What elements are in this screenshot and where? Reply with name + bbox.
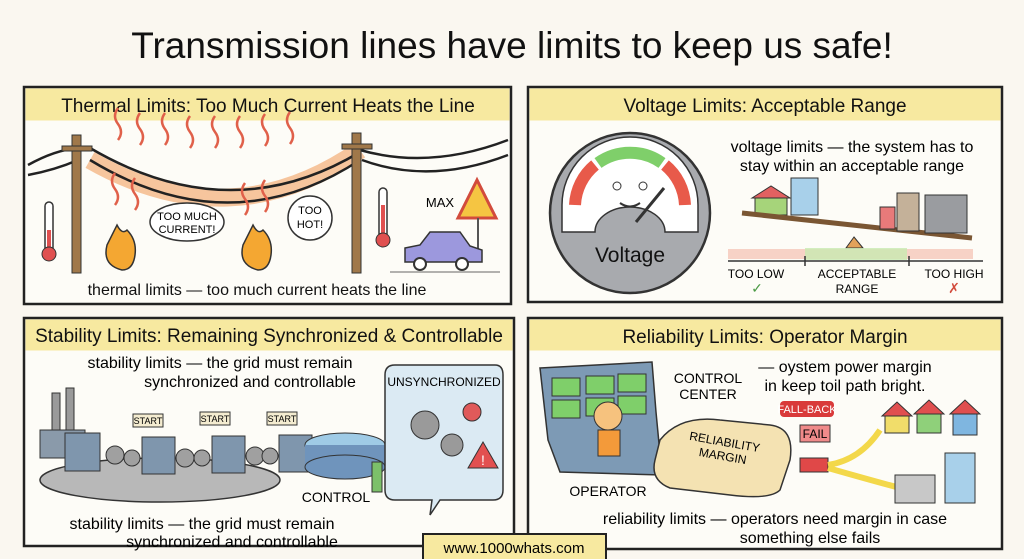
seesaw: buildings [742, 178, 972, 248]
illustration: control center and operator: OPERATOR [569, 483, 647, 499]
caption: reliability [603, 511, 947, 547]
illustration: generators on gear: START [201, 414, 230, 424]
icon: thermometer right [376, 188, 390, 247]
heading: voltage [530, 88, 1000, 120]
panel: reliability limits [528, 318, 1002, 549]
illustration: control center and operator: CONTROL [674, 370, 742, 386]
caption: stability: synchronized and controllable [126, 534, 338, 551]
illustration: reliability margin cushion [654, 419, 791, 497]
heading: stability [26, 320, 512, 350]
illustration: reliability margin cushion: MARGIN [698, 445, 748, 467]
heading: reliability: Reliability Limits: Operator Margin [622, 327, 908, 348]
callout: unsynchronized: ! [481, 452, 485, 468]
icon: thermometer left [42, 202, 56, 261]
footer: website [423, 534, 606, 559]
text: voltage description: voltage limits — the system has to [731, 139, 973, 156]
icon: MAX warning sign and car [390, 180, 500, 272]
illustration: power lines with heat [28, 108, 508, 273]
text: voltage description: stay within an acceptable range [740, 158, 964, 175]
callout: unsynchronized: UNSYNCHRONIZED [387, 375, 501, 389]
character: flame 1 with bubble [106, 203, 224, 270]
gauge: voltage meter: Voltage [595, 244, 665, 267]
character: flame 2 with bubble [242, 196, 332, 270]
text: stability top: synchronized and controllable [144, 374, 356, 391]
text: margin note: in keep toil path bright. [764, 378, 926, 395]
range scale: ✗ [948, 280, 960, 296]
illustration: generators on gear: CONTROL [302, 489, 370, 505]
character: flame 1 with bubble: CURRENT! [159, 224, 215, 236]
caption: stability [70, 516, 338, 551]
illustration: generators on gear: START [134, 416, 163, 426]
range scale: TOO LOW [728, 267, 785, 281]
panel: stability limits [24, 318, 514, 551]
icon: MAX warning sign and car: MAX [426, 195, 454, 210]
text: voltage description [731, 139, 973, 175]
heading: stability: Stability Limits: Remaining Synchronized & Controllable [35, 326, 503, 347]
illustration: generators on gear: START [268, 414, 297, 424]
illustration: reliability margin cushion: RELIABILITY [688, 429, 761, 455]
range scale: ACCEPTABLE [818, 267, 896, 281]
heading: reliability [530, 320, 1000, 350]
caption: thermal: thermal limits — too much current heats the line [88, 282, 426, 299]
panel: voltage limits [528, 87, 1002, 302]
text: stability top [88, 355, 356, 391]
illustration: generators on gear [40, 388, 414, 505]
character: flame 2 with bubble: TOO [298, 205, 322, 217]
caption: reliability: something else fails [740, 530, 880, 547]
text: margin note [758, 359, 932, 395]
panel: thermal limits [24, 87, 511, 304]
heading: voltage: Voltage Limits: Acceptable Range [623, 96, 907, 117]
label: fall-back / fail: FALL-BACK [777, 404, 837, 416]
title: Transmission lines have limits to keep us safe! [131, 25, 893, 66]
heading: thermal [26, 88, 510, 120]
range scale [728, 248, 984, 296]
text: stability top: stability limits — the grid must remain [88, 355, 352, 372]
heading: thermal: Thermal Limits: Too Much Current Heats the Line [61, 96, 475, 117]
label: fall-back / fail: FAIL [803, 427, 828, 441]
gauge: voltage meter [550, 133, 710, 293]
label: fall-back / fail [777, 401, 837, 472]
character: flame 2 with bubble: HOT! [297, 219, 323, 231]
range scale: TOO HIGH [924, 267, 984, 281]
illustration: control center and operator: CENTER [679, 386, 737, 402]
illustration: houses and buildings [828, 400, 980, 503]
footer: website: www.1000whats.com [443, 540, 584, 557]
illustration: control center and operator [540, 362, 742, 499]
range scale: RANGE [836, 282, 878, 296]
callout: unsynchronized [385, 365, 503, 515]
range scale: ✓ [751, 280, 763, 296]
caption: stability: stability limits — the grid must remain [70, 516, 334, 533]
caption: reliability: reliability limits — operators need margin in case [603, 511, 947, 528]
character: flame 1 with bubble: TOO MUCH [157, 211, 217, 223]
text: margin note: — oystem power margin [758, 359, 932, 376]
